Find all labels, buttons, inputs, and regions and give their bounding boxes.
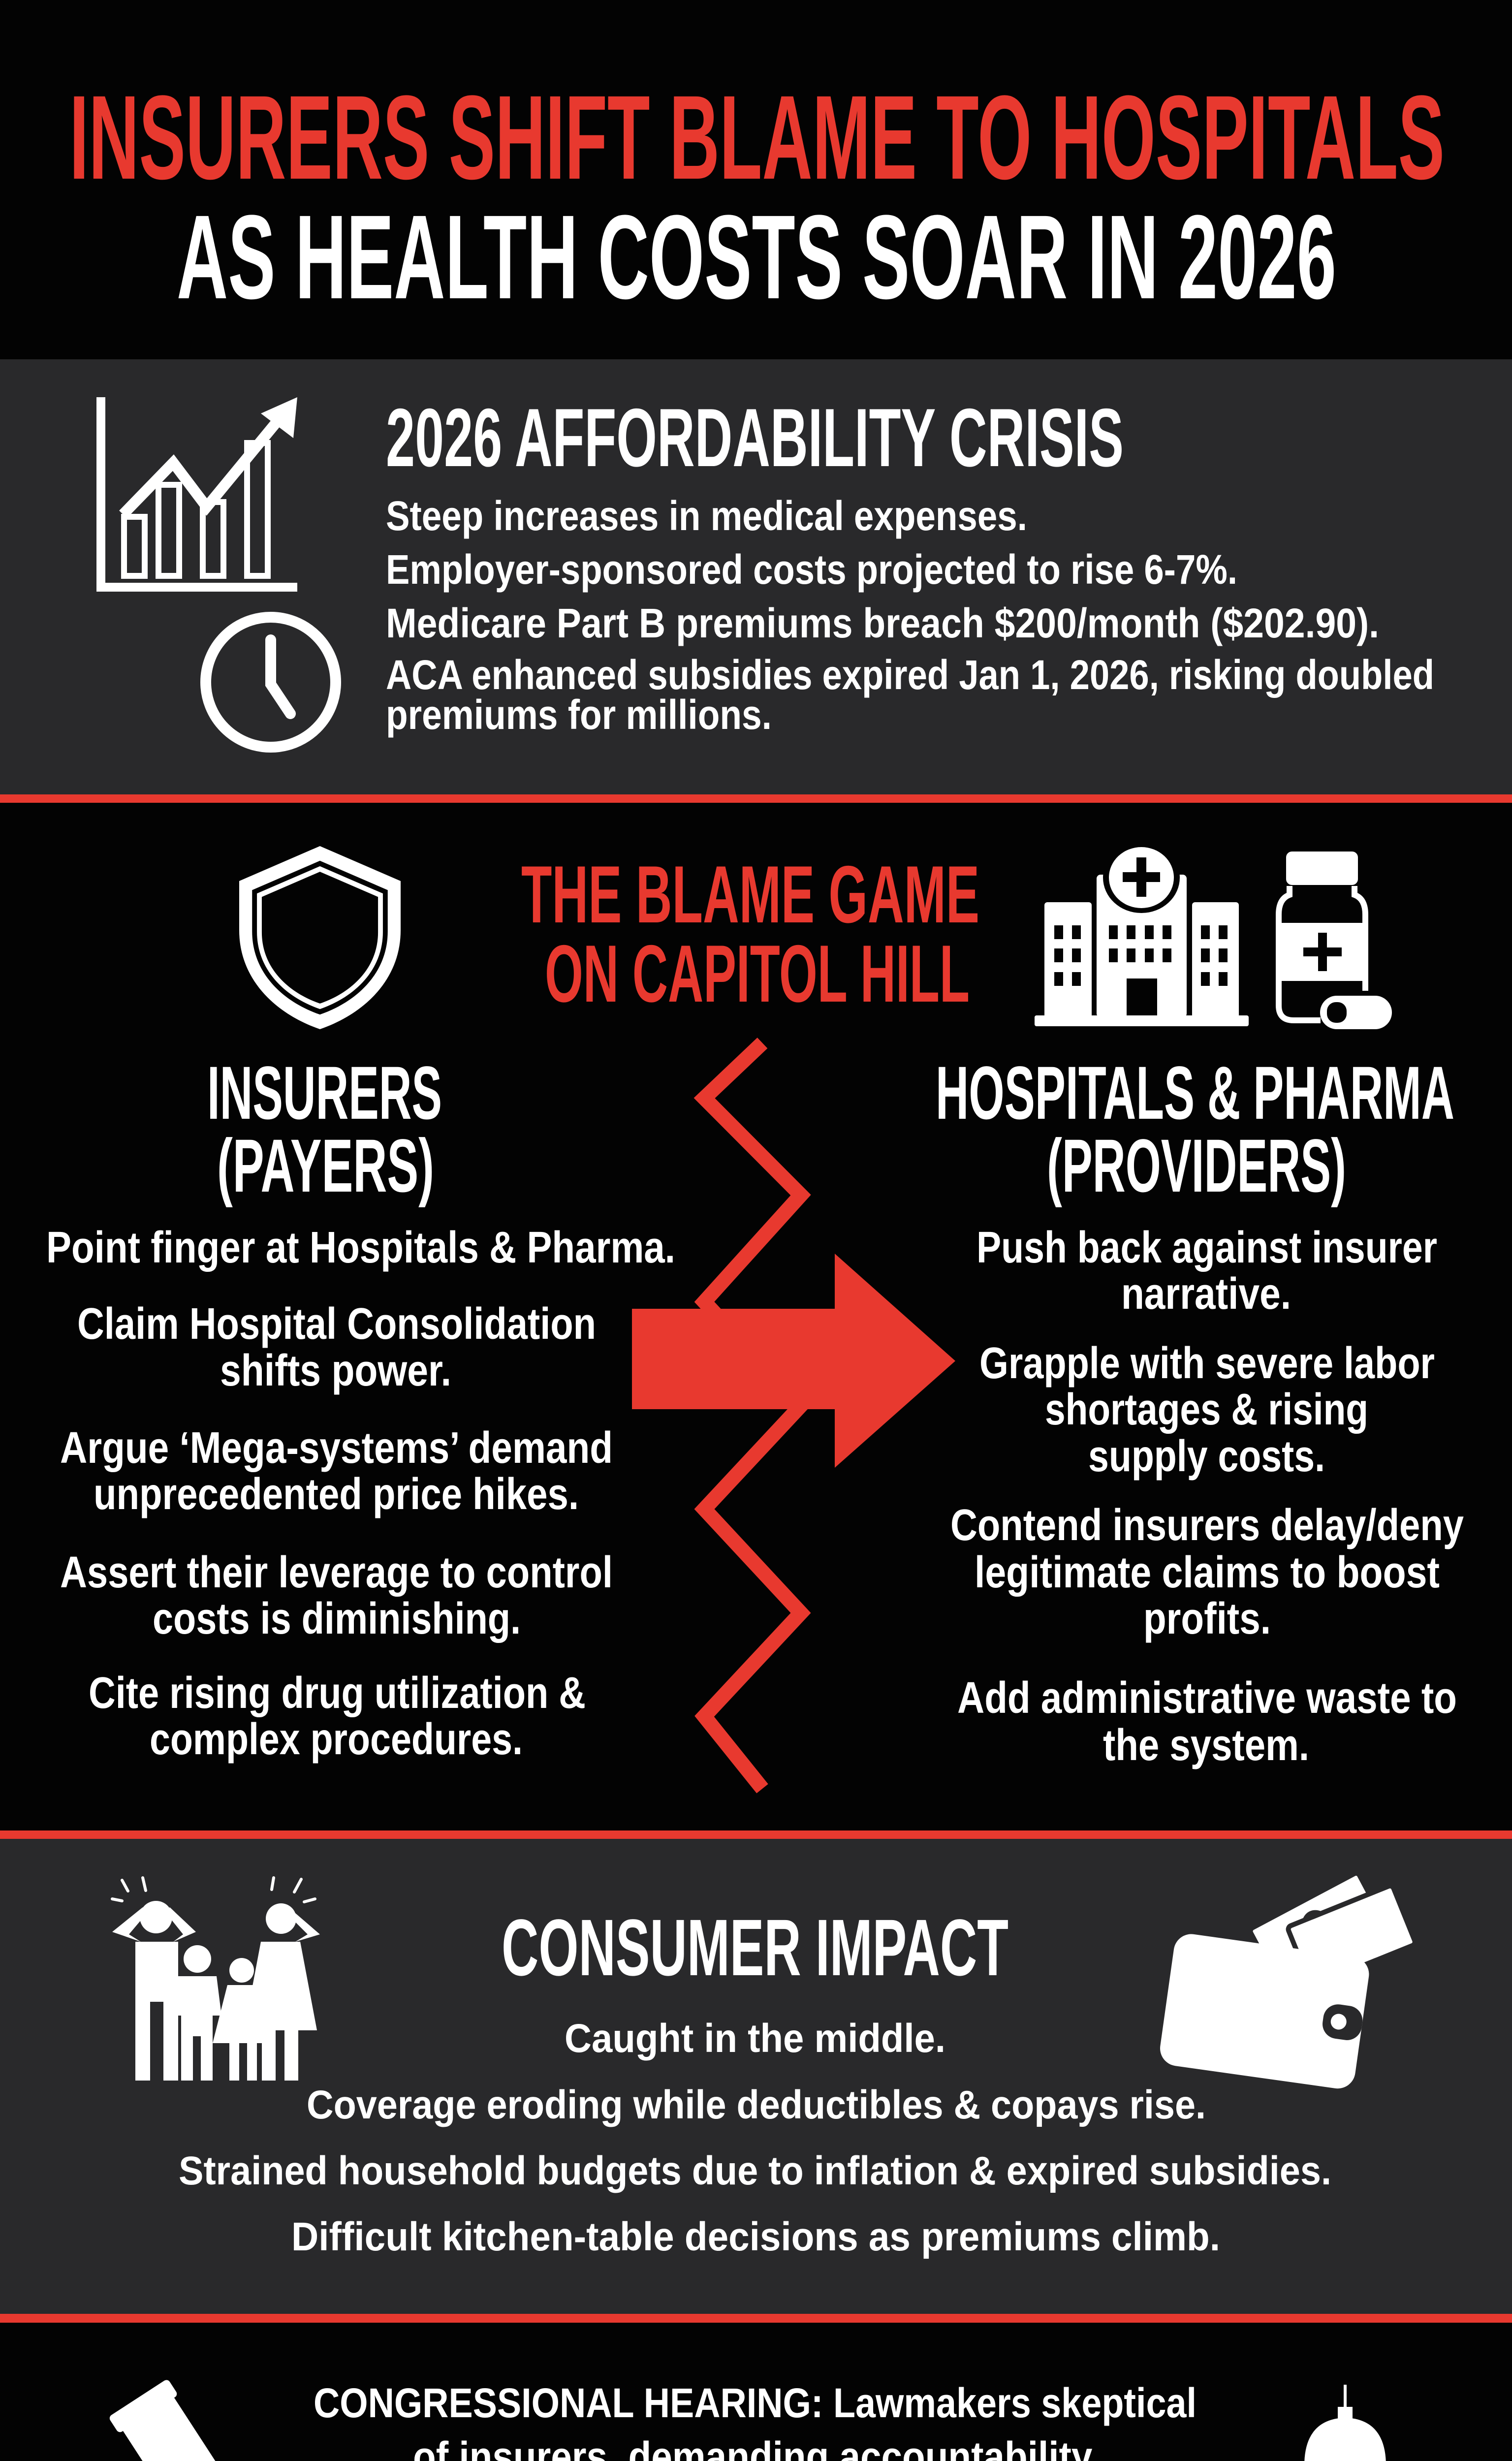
text block: provider claims: supply costs. — [1088, 1432, 1325, 1481]
text block: crisis facts — [386, 493, 1434, 738]
text block: consumer impact: Difficult kitchen-table decisions as premiums climb. — [291, 2214, 1220, 2259]
text block: insurer claims: complex procedures. — [150, 1715, 523, 1764]
heading: insurers: INSURERS — [207, 1051, 442, 1135]
panel: consumer impact — [112, 1872, 1416, 2259]
icon: wallet with cash — [1158, 1872, 1416, 2091]
text block: crisis facts: Steep increases in medical expenses. — [386, 493, 1027, 539]
heading: insurers — [207, 1051, 442, 1208]
arrow: blame arrow — [632, 1254, 955, 1468]
text block: crisis facts: premiums for millions. — [386, 692, 772, 738]
heading: insurers: (PAYERS) — [217, 1124, 434, 1208]
text block: provider claims: Push back against insurer — [976, 1223, 1437, 1272]
text block: insurer claims: Cite rising drug utilization & — [89, 1669, 586, 1718]
text block: crisis facts: Employer-sponsored costs projected to rise 6-7%. — [386, 546, 1237, 593]
panel: affordability crisis — [101, 391, 1434, 747]
icon: hospital — [1035, 842, 1249, 1026]
text block: insurer claims: Argue ‘Mega-systems’ demand — [60, 1423, 613, 1473]
panel: blame game — [46, 842, 1464, 1789]
heading: hospitals & pharma — [936, 1051, 1454, 1208]
icon: stressed family — [112, 1878, 320, 2081]
arrow: zigzag divider — [704, 1043, 801, 1789]
title — [69, 71, 1445, 324]
text block: provider claims: legitimate claims to boost — [975, 1548, 1440, 1597]
icon: medicine bottle — [1279, 852, 1392, 1029]
panel: congressional hearing — [0, 2378, 1465, 2461]
icon: gavel — [0, 2378, 273, 2461]
icon: rising chart — [101, 397, 297, 587]
text block: insurer claims: unprecedented price hikes. — [94, 1470, 579, 1519]
text block: consumer impact: Strained household budgets due to inflation & expired subsidies. — [179, 2148, 1331, 2193]
text block: provider claims: narrative. — [1121, 1269, 1291, 1319]
text block: provider claims: profits. — [1143, 1594, 1271, 1643]
icon: clock — [206, 617, 336, 747]
heading: the blame game on capitol hill: ON CAPITOL HILL — [545, 928, 970, 1019]
text block: provider claims: shortages & rising — [1045, 1385, 1368, 1434]
text block: insurer claims: Assert their leverage to control — [60, 1548, 613, 1597]
text block: insurer claims: Point finger at Hospitals & Pharma. — [46, 1223, 675, 1272]
text block: insurer claims: costs is diminishing. — [153, 1594, 521, 1643]
text block: consumer impact: Coverage eroding while deductibles & copays rise. — [307, 2082, 1206, 2127]
text block: provider claims: the system. — [1103, 1721, 1309, 1770]
text block: provider claims: Grapple with severe labor — [979, 1339, 1435, 1388]
text block: crisis facts: Medicare Part B premiums breach $200/month ($202.90). — [386, 600, 1379, 646]
text block: consumer impact — [179, 2016, 1331, 2259]
text block: hearing summary: CONGRESSIONAL HEARING: Lawmakers skeptical — [314, 2380, 1197, 2426]
text block: consumer impact: Caught in the middle. — [565, 2016, 945, 2061]
icon: shield — [239, 846, 401, 1029]
icon: capitol building — [1226, 2385, 1465, 2461]
heading: the blame game on capitol hill — [521, 849, 979, 1019]
text block: hearing summary — [312, 2380, 1199, 2461]
text block: provider claims — [950, 1223, 1464, 1770]
heading: the blame game on capitol hill: THE BLAME GAME — [521, 849, 979, 940]
text block: insurer claims: shifts power. — [220, 1346, 451, 1395]
text block: insurer claims — [46, 1223, 675, 1764]
text block: insurer claims: Claim Hospital Consolidation — [77, 1299, 596, 1349]
heading: consumer impact: CONSUMER IMPACT — [502, 1902, 1008, 1992]
